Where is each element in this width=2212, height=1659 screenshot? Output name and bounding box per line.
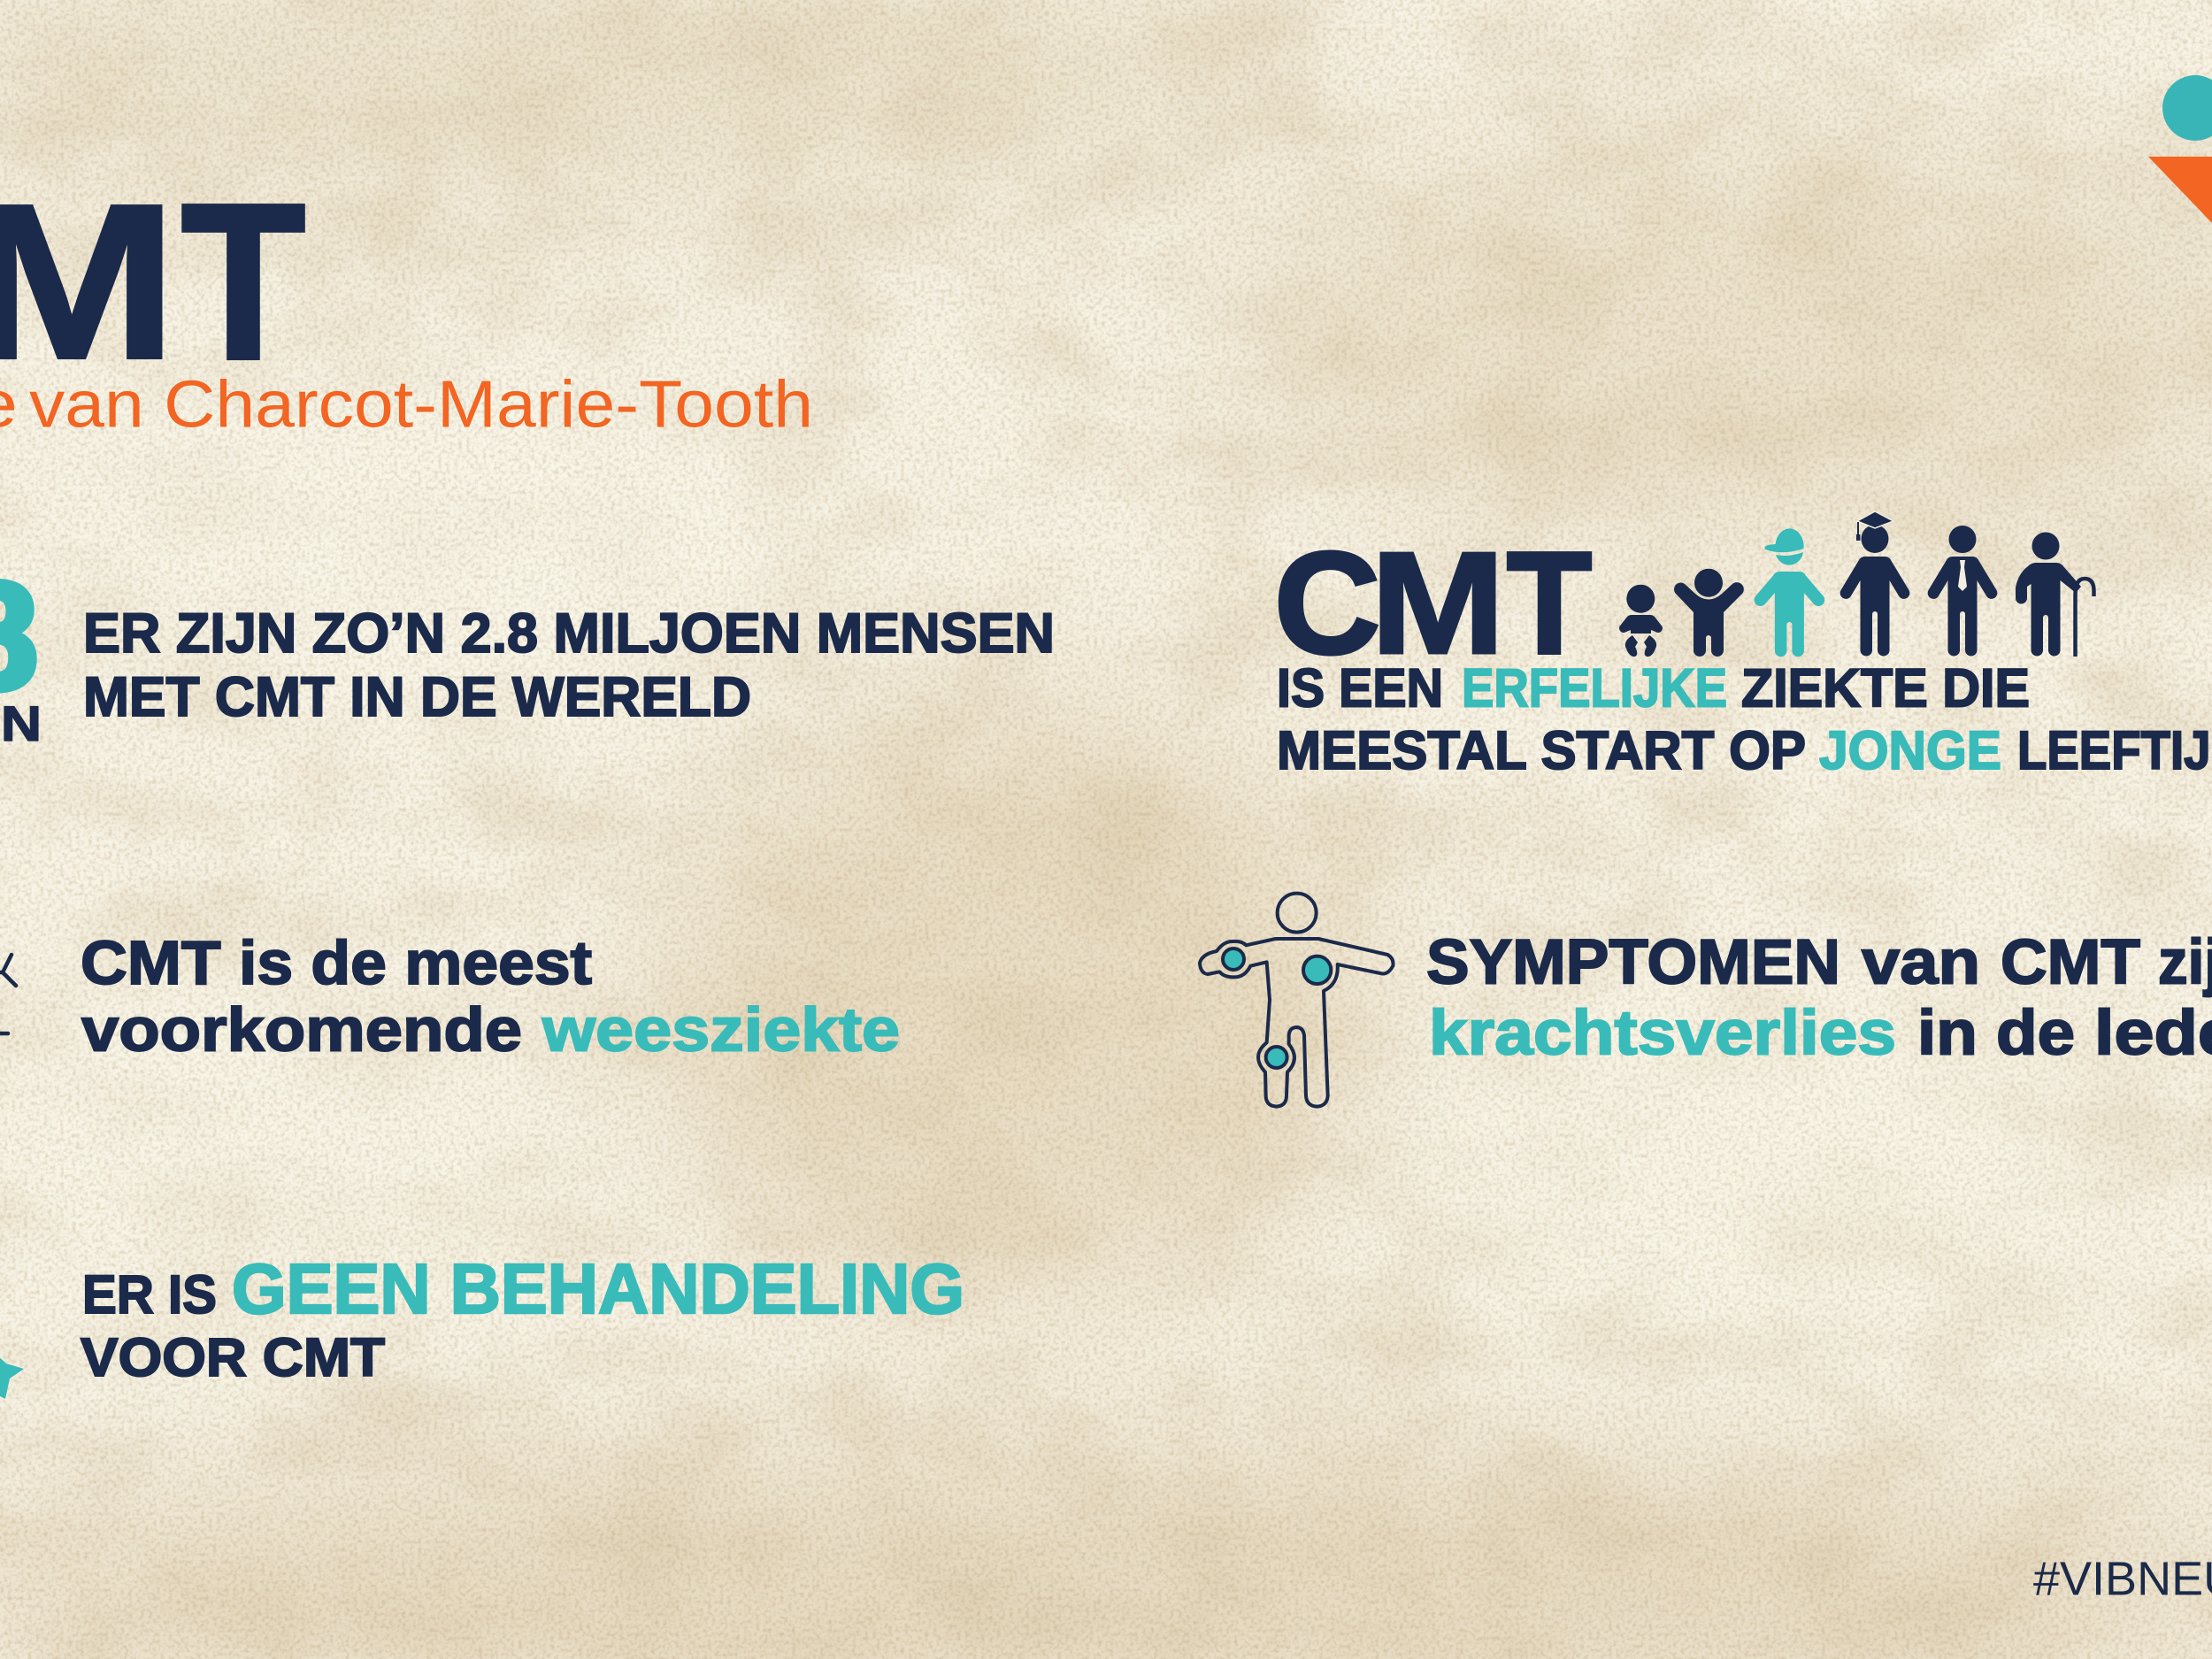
icon: elderly man with cane <box>2016 533 2093 657</box>
icon: graduate <box>1840 511 1909 656</box>
text: erfelijke ziekte, jonge leeftijd: IS EEN <box>1277 658 1443 718</box>
text: 2.8 miljoen mensen: ER ZIJN ZO’N 2.8 MILJOEN MENSEN <box>83 603 1055 664</box>
icon: star fragment <box>0 1355 24 1399</box>
text: meest voorkomende weesziekte <box>81 928 900 1064</box>
icon: life stages people <box>1619 511 2093 657</box>
text: symptomen krachtsverlies: SYMPTOMEN <box>1426 928 1840 998</box>
text: meest voorkomende weesziekte: weesziekte <box>541 995 900 1064</box>
text: meest voorkomende weesziekte: voorkomende <box>81 995 522 1064</box>
text: geen behandeling <box>81 1249 964 1387</box>
heading: CMT: M <box>1371 522 1505 684</box>
text: geen behandeling: VOOR CMT <box>81 1327 385 1387</box>
text: erfelijke ziekte, jonge leeftijd: JONGE <box>1819 720 2001 780</box>
heading: CMT: C <box>1274 522 1380 684</box>
icon: body outline with affected joints <box>1200 894 1394 1107</box>
text: symptomen krachtsverlies <box>1426 928 2212 1069</box>
icon: boy with cap <box>1755 528 1824 657</box>
text: 2.8 miljoen mensen: MET CMT IN DE WERELD <box>83 666 751 728</box>
icon: toddler <box>1674 569 1744 657</box>
heading: CMT: T <box>1507 522 1592 684</box>
text: geen behandeling: ER IS <box>82 1264 217 1325</box>
heading: CMT <box>1274 522 1592 684</box>
text: symptomen krachtsverlies: in de <box>1917 999 2075 1069</box>
text: erfelijke ziekte, jonge leeftijd <box>1277 658 2212 780</box>
icon: man with tie <box>1928 526 1997 656</box>
text: 2.8 miljoen mensen <box>83 603 1055 728</box>
text: erfelijke ziekte, jonge leeftijd: ERFELIJKE <box>1462 658 1727 718</box>
logo: circle and triangle <box>2148 75 2212 232</box>
icon: orphan disease fragment <box>0 955 16 1033</box>
text: geen behandeling: GEEN BEHANDELING <box>232 1249 964 1328</box>
icon: baby <box>1619 585 1663 657</box>
text: symptomen krachtsverlies: CMT <box>2001 928 2140 998</box>
text: symptomen krachtsverlies: krachtsverlies <box>1429 999 1896 1069</box>
text: meest voorkomende weesziekte: CMT is de meest <box>81 928 592 997</box>
subtitle: ziekte van Charcot-Marie-Tooth: van Charcot-Marie-Tooth <box>29 367 813 442</box>
title: CMT: T <box>181 158 305 405</box>
stat: 2.8 miljoen: N <box>1 695 42 751</box>
text: erfelijke ziekte, jonge leeftijd: MEESTAL START OP <box>1277 720 1806 780</box>
text: erfelijke ziekte, jonge leeftijd: ZIEKTE DIE <box>1741 658 2030 718</box>
text: symptomen krachtsverlies: van <box>1862 928 1980 998</box>
title: CMT <box>0 158 305 405</box>
